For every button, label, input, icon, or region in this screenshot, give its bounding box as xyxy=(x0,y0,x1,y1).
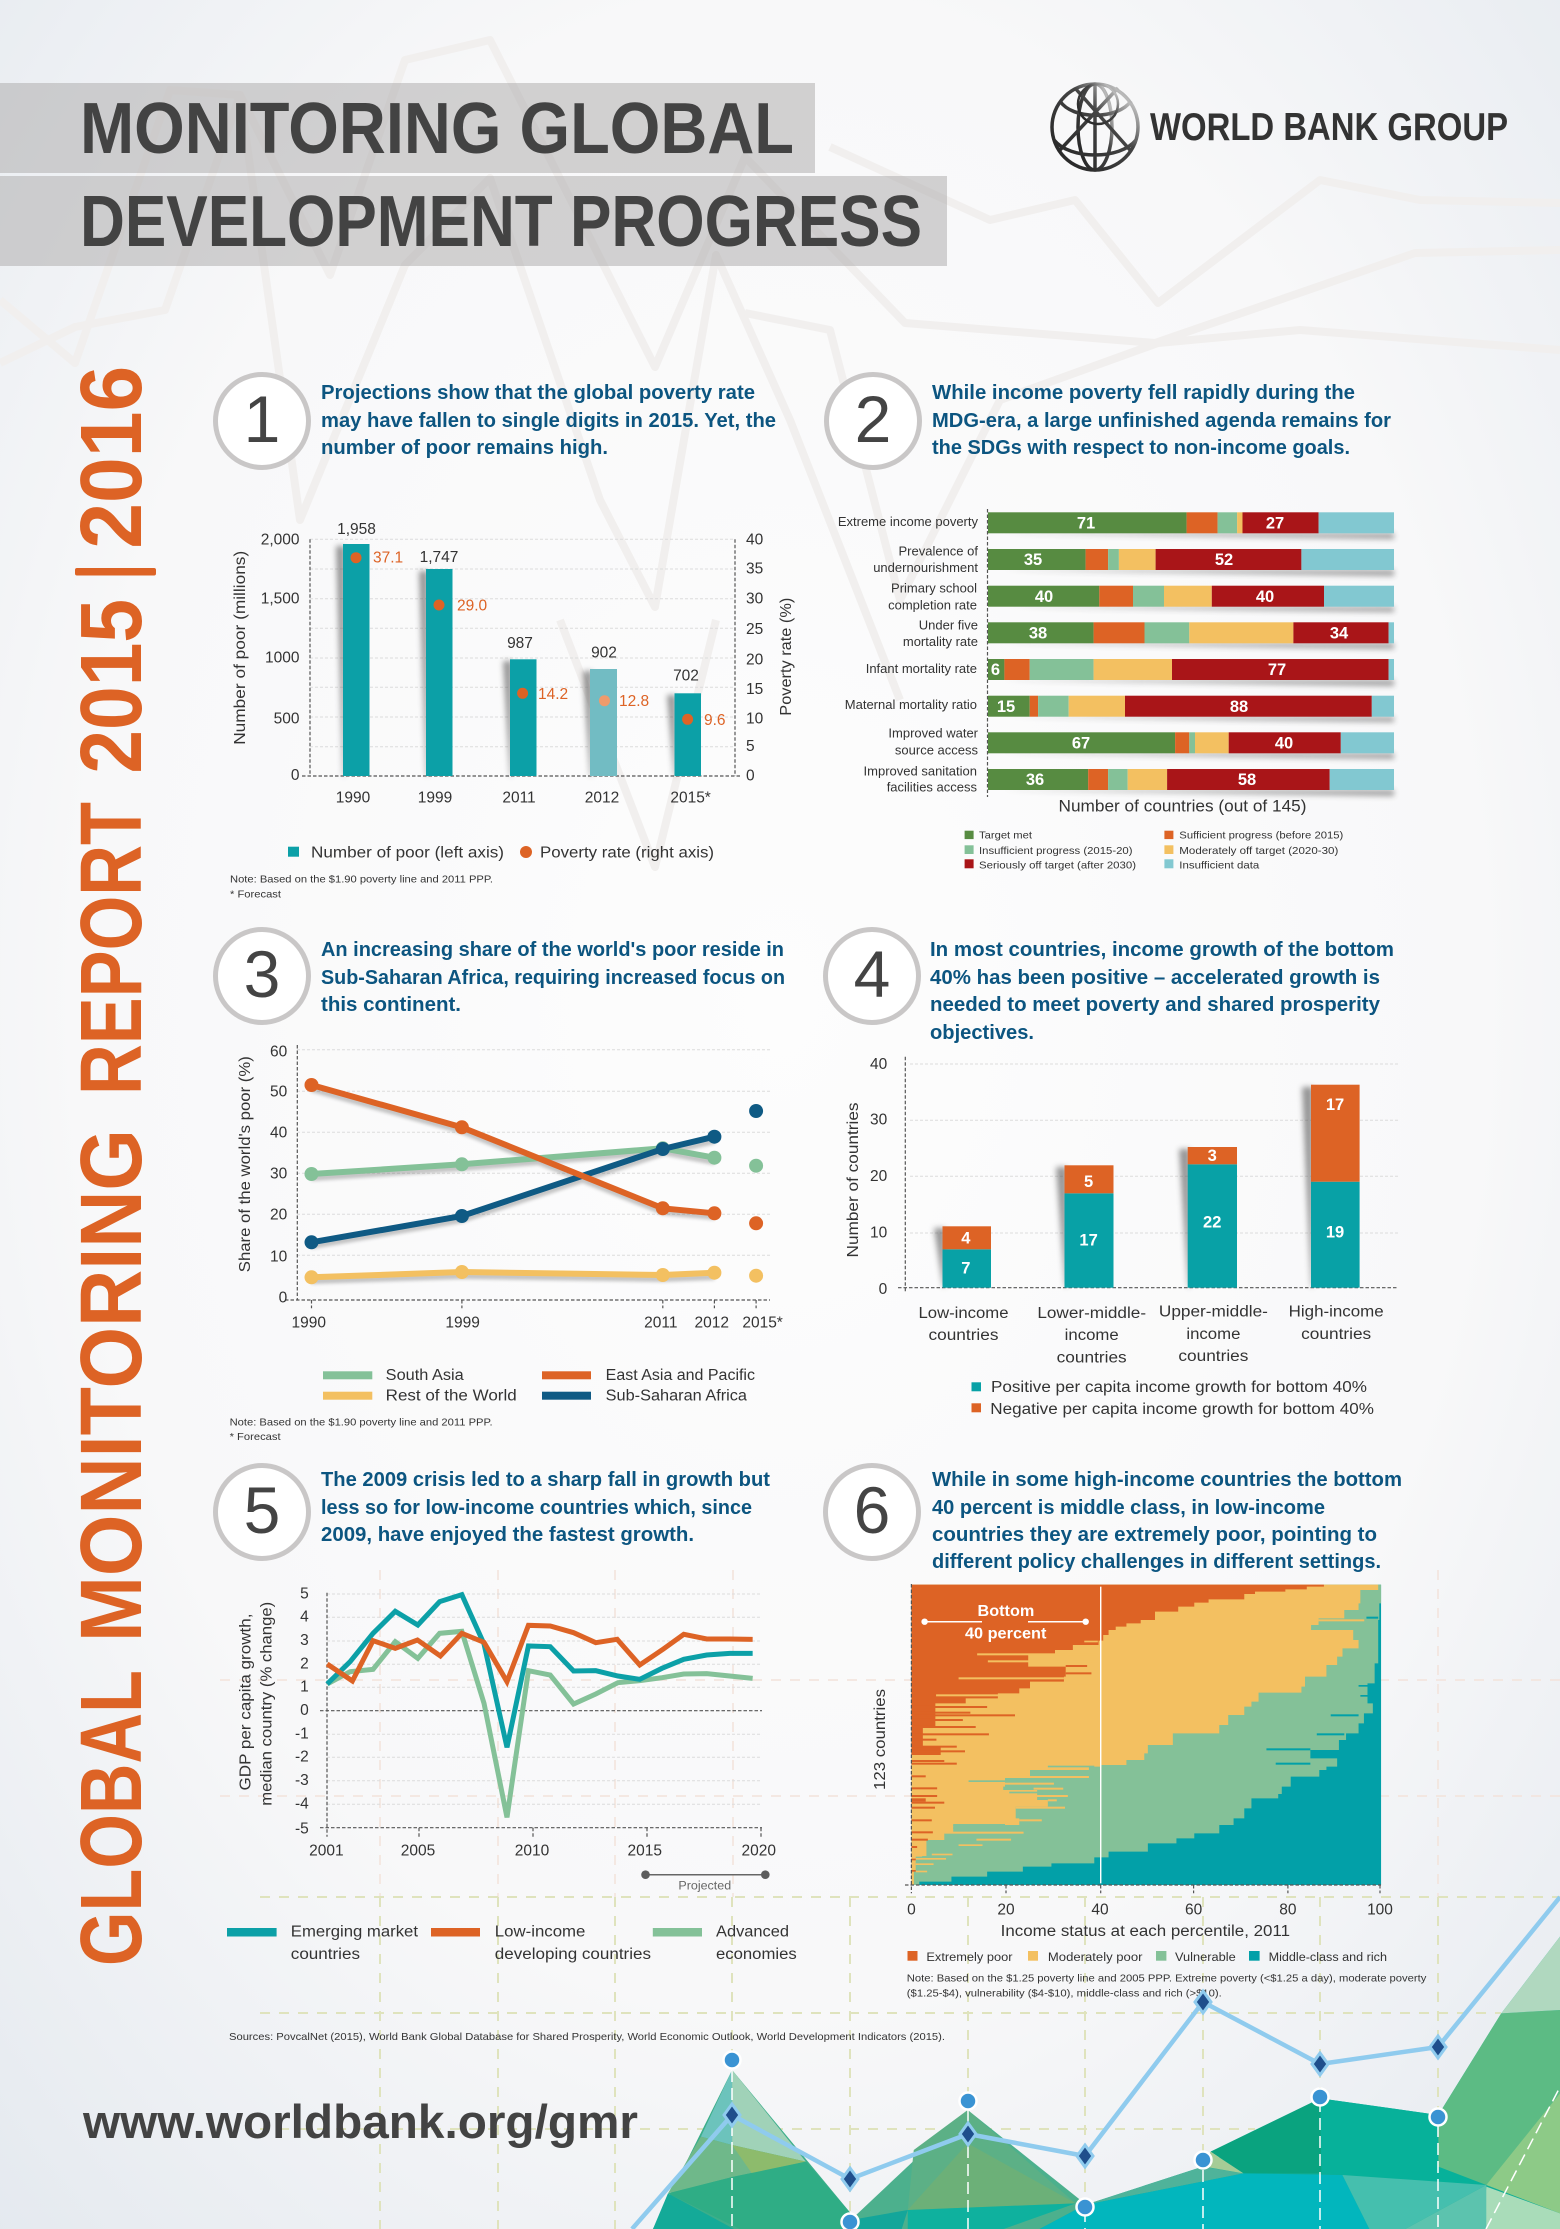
x axis labels: 40 xyxy=(1091,1901,1109,1918)
legend xyxy=(908,1951,1387,1964)
category labels: countries xyxy=(928,1327,999,1344)
bar: sanitation: 58 xyxy=(1238,771,1256,789)
category labels: countries xyxy=(1178,1348,1249,1365)
line: south asia xyxy=(304,1141,763,1181)
category labels: High-income xyxy=(1289,1304,1384,1321)
y axis labels: -4 xyxy=(295,1795,309,1812)
poverty rate values: 12.8 xyxy=(619,693,649,710)
year labels: 2010 xyxy=(515,1842,550,1859)
category labels: countries xyxy=(1057,1349,1127,1366)
bar: infant mortality: 77 xyxy=(1268,661,1286,679)
bar: maternal mortality: 88 xyxy=(1230,698,1248,716)
left axis labels: 1,500 xyxy=(261,591,300,608)
category labels: income xyxy=(1186,1326,1240,1343)
panel 2 heading: While income poverty fell rapidly during the xyxy=(932,382,1355,404)
bar: undernourishment xyxy=(988,549,1394,570)
note: * Forecast xyxy=(230,1431,281,1443)
panel 5 heading: 5 xyxy=(244,1473,280,1547)
number of poor values: 702 xyxy=(673,667,699,684)
area: moderately poor xyxy=(911,1585,1378,1885)
poverty rate values: 14.2 xyxy=(538,686,568,703)
poverty rate values xyxy=(373,550,726,729)
row labels: Primary school xyxy=(891,580,977,595)
legend: Advanced xyxy=(716,1924,789,1941)
website url: www.worldbank.org/gmr xyxy=(82,2095,638,2148)
legend: Insufficient data xyxy=(1179,859,1259,871)
y axis labels: -3 xyxy=(295,1772,309,1789)
legend: Rest of the World xyxy=(386,1387,517,1404)
panel 1 heading: 1 xyxy=(244,382,280,456)
y axis labels: 40 xyxy=(870,1056,888,1073)
bar: sanitation xyxy=(988,769,1394,790)
area: vulnerable xyxy=(911,1585,1381,1885)
right axis labels xyxy=(746,532,764,785)
legend: Extremely poor xyxy=(926,1952,1013,1964)
panel 3 heading: this continent. xyxy=(321,994,461,1016)
left axis labels: 1000 xyxy=(265,650,300,667)
panel 3 chart: share of the world's poor xyxy=(230,1044,783,1443)
panel 2 heading: the SDGs with respect to non-income goals. xyxy=(932,437,1350,459)
left axis labels: 0 xyxy=(291,767,300,784)
line: sub-saharan africa xyxy=(304,1104,763,1249)
row labels xyxy=(838,514,979,795)
legend xyxy=(972,1379,1374,1418)
note: ($1.25-$4), vulnerability ($4-$10), middle-class and rich (>$10). xyxy=(907,1988,1222,2000)
bar: infant mortality: 6 xyxy=(991,661,1000,679)
panel 6 heading: 40 percent is middle class, in low-income xyxy=(932,1497,1325,1519)
side title: MONITORING xyxy=(63,1129,160,1642)
legend xyxy=(227,1924,797,1963)
year labels: 2012 xyxy=(585,790,619,807)
y axis title: Number of countries xyxy=(845,1102,862,1257)
y axis labels: 10 xyxy=(870,1225,888,1242)
legend xyxy=(965,829,1343,871)
panel 1 heading xyxy=(216,374,776,468)
right axis labels: 35 xyxy=(746,560,763,577)
panel 5 heading: 2009, have enjoyed the fastest growth. xyxy=(321,1524,694,1546)
legend: economies xyxy=(716,1946,797,1963)
bar: maternal mortality: 15 xyxy=(997,698,1015,716)
bar: water: 40 xyxy=(1275,734,1293,752)
y axis labels: 30 xyxy=(270,1165,288,1182)
panel 4 heading: In most countries, income growth of the bottom xyxy=(930,939,1394,961)
right axis labels: 0 xyxy=(746,768,755,785)
note: Note: Based on the $1.90 poverty line and 2011 PPP. xyxy=(230,874,493,886)
area: extremely poor xyxy=(911,1585,1324,1872)
row labels: Extreme income poverty xyxy=(838,514,978,529)
category labels: countries xyxy=(1301,1326,1371,1343)
legend: Emerging market xyxy=(291,1924,419,1941)
legend: Seriously off target (after 2030) xyxy=(979,859,1136,871)
number of poor values: 987 xyxy=(507,635,533,652)
row labels: mortality rate xyxy=(903,634,978,649)
panel 2 heading xyxy=(826,374,1391,468)
x axis labels: 60 xyxy=(1185,1901,1203,1918)
bar: primary school: 40 xyxy=(1035,588,1053,606)
right axis labels: 40 xyxy=(746,532,764,549)
panel 6 heading xyxy=(826,1466,1402,1573)
legend xyxy=(323,1367,755,1404)
legend: South Asia xyxy=(386,1367,464,1384)
bar: infant mortality xyxy=(988,659,1394,680)
row labels: Under five xyxy=(919,617,978,632)
year labels: 2005 xyxy=(401,1842,435,1859)
sources: Sources: PovcalNet (2015), World Bank Global Database for Shared Prosperity, World Economic Outlook, World Development Indicators (2015). xyxy=(229,2031,945,2043)
year labels xyxy=(336,790,711,807)
legend: Positive per capita income growth for bottom 40% xyxy=(991,1379,1367,1396)
bar values xyxy=(961,1096,1344,1277)
legend: Number of poor (left axis) xyxy=(311,844,504,861)
note xyxy=(230,1416,493,1443)
y axis labels: 50 xyxy=(270,1084,288,1101)
year labels: 2020 xyxy=(742,1842,776,1859)
note xyxy=(907,1973,1427,2000)
bar: under five mortality xyxy=(988,622,1394,643)
legend: Poverty rate (right axis) xyxy=(540,844,714,861)
logo: World Bank Group xyxy=(1052,84,1508,170)
right axis labels: 5 xyxy=(746,738,755,755)
title banner: DEVELOPMENT PROGRESS xyxy=(80,182,922,262)
panel 1 heading: number of poor remains high. xyxy=(321,437,608,459)
panel 3 heading: 3 xyxy=(244,937,280,1011)
panel 5 heading: The 2009 crisis led to a sharp fall in growth but xyxy=(321,1469,770,1491)
projected range: Projected xyxy=(678,1880,731,1892)
right axis labels: 25 xyxy=(746,621,763,638)
axis titles xyxy=(232,551,795,745)
y axis labels: -2 xyxy=(295,1749,309,1766)
x axis labels: 80 xyxy=(1279,1901,1297,1918)
legend: Low-income xyxy=(495,1924,585,1941)
streaks: yellow in extremely poor xyxy=(936,1641,1099,1696)
row labels: Maternal mortality ratio xyxy=(845,697,977,712)
y axis labels: 4 xyxy=(300,1608,309,1625)
poverty rate values: 29.0 xyxy=(457,597,488,614)
bar: undernourishment: 35 xyxy=(1024,551,1042,569)
x axis labels: 0 xyxy=(907,1901,916,1918)
row labels: undernourishment xyxy=(873,560,978,575)
row labels: Improved sanitation xyxy=(864,763,977,778)
footer graphic: mountains xyxy=(653,1937,1560,2229)
y axis labels: 20 xyxy=(870,1168,888,1185)
bar: extreme income poverty xyxy=(988,512,1394,533)
category labels xyxy=(918,1304,1384,1366)
year labels xyxy=(309,1842,776,1859)
footer graphic: blue line with diamonds xyxy=(632,1897,1560,2229)
note: Note: Based on the $1.25 poverty line and 2005 PPP. Extreme poverty (<$1.25 a day), moderate poverty xyxy=(907,1973,1427,1985)
y axis labels: 0 xyxy=(279,1289,288,1306)
right axis labels: 10 xyxy=(746,710,764,727)
panel 1 heading: may have fallen to single digits in 2015. Yet, the xyxy=(321,410,776,432)
legend: developing countries xyxy=(495,1946,651,1963)
line: low-income developing countries xyxy=(327,1625,753,1682)
poverty rate values: 9.6 xyxy=(704,712,726,729)
number of poor values xyxy=(337,521,699,684)
panel 5 heading xyxy=(216,1466,770,1558)
x axis labels xyxy=(907,1901,1393,1918)
panel 6 heading: different policy challenges in different settings. xyxy=(932,1551,1381,1573)
bar values: 17 xyxy=(1326,1096,1344,1114)
note: * Forecast xyxy=(230,888,281,900)
year labels: 2012 xyxy=(694,1315,729,1332)
y axis labels: 20 xyxy=(270,1206,288,1223)
left axis labels: 500 xyxy=(274,710,300,727)
line: east asia and pacific xyxy=(304,1078,763,1230)
legend: Target met xyxy=(979,829,1032,841)
legend: countries xyxy=(291,1946,360,1963)
bottom 40 percent marker xyxy=(921,1603,1089,1643)
panel 5 chart: GDP per capita growth xyxy=(227,1586,797,1963)
bar values: 7 xyxy=(961,1259,970,1277)
bar values: 4 xyxy=(961,1229,971,1247)
year labels: 2015* xyxy=(742,1315,783,1332)
footer graphic: blue circles xyxy=(724,2052,1446,2229)
bar: primary school: 40 xyxy=(1256,588,1274,606)
number of poor values: 902 xyxy=(591,645,617,662)
y axis labels: 10 xyxy=(270,1249,288,1266)
y axis title: median country (% change) xyxy=(259,1602,276,1806)
panel 4 heading: 4 xyxy=(854,937,890,1011)
y axis labels: 30 xyxy=(870,1111,888,1128)
side title: 2016 xyxy=(63,366,160,549)
bar values: 5 xyxy=(1084,1173,1093,1191)
year labels: 1990 xyxy=(292,1315,326,1332)
poverty rate values: 37.1 xyxy=(373,550,403,567)
bar: under five mortality: 34 xyxy=(1330,624,1349,642)
line: 40th percentile xyxy=(1100,1587,1101,1883)
side title xyxy=(63,366,160,1966)
y axis labels: 0 xyxy=(879,1281,888,1298)
year labels: 2015* xyxy=(670,790,711,807)
bar: under five mortality: 38 xyxy=(1029,624,1047,642)
legend: Vulnerable xyxy=(1175,1952,1236,1964)
year labels: 2011 xyxy=(644,1315,677,1332)
legend: Sub-Saharan Africa xyxy=(606,1387,747,1404)
panel 4 heading xyxy=(826,930,1394,1044)
panel 3 heading xyxy=(216,930,785,1022)
category labels: Lower-middle- xyxy=(1037,1305,1146,1322)
streaks: teal in vulnerable xyxy=(1266,1617,1378,1765)
area: middle-class and rich xyxy=(911,1585,1381,1885)
panel 2 heading: 2 xyxy=(855,382,891,456)
left axis labels: 2,000 xyxy=(261,532,300,549)
panel 6 heading: countries they are extremely poor, pointing to xyxy=(932,1524,1377,1546)
y axis labels xyxy=(295,1586,309,1837)
stacked bars xyxy=(942,1085,1360,1288)
right axis labels: 30 xyxy=(746,590,764,607)
legend: East Asia and Pacific xyxy=(606,1367,755,1384)
note: Note: Based on the $1.90 poverty line and 2011 PPP. xyxy=(230,1416,493,1428)
y axis title: GDP per capita growth, xyxy=(238,1614,255,1790)
panel 5 heading: less so for low-income countries which, since xyxy=(321,1497,752,1519)
y axis labels: 1 xyxy=(300,1679,309,1696)
bar: water: 67 xyxy=(1072,734,1090,752)
right axis labels: 20 xyxy=(746,652,764,669)
panel 6 heading: 6 xyxy=(854,1473,890,1547)
legend xyxy=(288,844,714,861)
side title: GLOBAL xyxy=(63,1670,160,1966)
y axis labels: 0 xyxy=(300,1702,309,1719)
bar: sanitation: 36 xyxy=(1026,771,1044,789)
legend: Middle-class and rich xyxy=(1269,1952,1387,1964)
year labels: 1999 xyxy=(418,790,452,807)
year labels: 2001 xyxy=(309,1842,344,1859)
x axis labels: 20 xyxy=(997,1901,1015,1918)
y axis title: 123 countries xyxy=(872,1689,889,1790)
right axis labels: 15 xyxy=(746,681,763,698)
bar: undernourishment: 52 xyxy=(1215,551,1233,569)
bar: maternal mortality xyxy=(988,696,1394,717)
bar values: 17 xyxy=(1079,1232,1098,1250)
line: emerging market countries xyxy=(327,1595,753,1747)
bottom 40 percent marker: 40 percent xyxy=(965,1626,1047,1643)
bar values: 22 xyxy=(1203,1213,1221,1231)
note xyxy=(230,874,493,900)
line: rest of the world xyxy=(304,1265,763,1284)
panel 4 heading: 40% has been positive – accelerated growth is xyxy=(930,967,1380,989)
legend: Sufficient progress (before 2015) xyxy=(1179,829,1343,841)
category labels: Low-income xyxy=(918,1305,1008,1322)
bar: extreme income poverty: 27 xyxy=(1266,514,1284,532)
panel 1 chart: number of poor and poverty rate xyxy=(230,521,795,900)
axis title: Number of countries (out of 145) xyxy=(1058,798,1306,816)
y axis labels: 3 xyxy=(300,1632,309,1649)
x axis title: Income status at each percentile, 2011 xyxy=(1001,1923,1290,1940)
bar: primary school xyxy=(988,586,1394,607)
bar values: 19 xyxy=(1326,1224,1344,1242)
year labels: 2015 xyxy=(628,1842,662,1859)
number of poor values: 1,747 xyxy=(420,549,458,566)
legend: Moderately poor xyxy=(1048,1952,1143,1964)
legend: Moderately off target (2020-30) xyxy=(1179,845,1338,857)
legend: Insufficient progress (2015-20) xyxy=(979,845,1132,857)
panel 6 chart: income status by percentile xyxy=(872,1584,1427,2000)
row labels: Infant mortality rate xyxy=(866,661,977,676)
x axis labels: 100 xyxy=(1367,1901,1393,1918)
legend: Negative per capita income growth for bottom 40% xyxy=(990,1401,1374,1418)
poverty rate dots xyxy=(350,552,693,725)
bar values: 3 xyxy=(1208,1147,1217,1165)
bottom 40 percent marker: Bottom xyxy=(978,1603,1034,1620)
y axis labels: 40 xyxy=(270,1124,288,1141)
y axis labels: 2 xyxy=(300,1655,309,1672)
year labels: 1990 xyxy=(336,790,371,807)
row labels: completion rate xyxy=(888,597,977,612)
streaks: yellow and green mix xyxy=(916,1766,1094,1872)
y axis title xyxy=(238,1602,276,1806)
axis titles: Number of poor (millions) xyxy=(232,551,249,745)
bar: extreme income poverty: 71 xyxy=(1077,514,1095,532)
panel 1 heading: Projections show that the global poverty rate xyxy=(321,382,755,404)
title banner: MONITORING GLOBAL xyxy=(80,89,794,169)
y axis labels: -5 xyxy=(295,1820,309,1837)
left axis labels xyxy=(261,532,300,784)
year labels xyxy=(292,1315,783,1332)
panel 4 heading: objectives. xyxy=(930,1022,1034,1044)
row labels: facilities access xyxy=(887,780,977,795)
title banner xyxy=(0,83,947,266)
row labels: source access xyxy=(895,742,978,757)
y axis labels xyxy=(870,1056,888,1298)
row labels: Improved water xyxy=(888,726,979,741)
side title: REPORT xyxy=(63,802,160,1095)
bar: water xyxy=(988,732,1394,753)
panel 2 heading: MDG-era, a large unfinished agenda remains for xyxy=(932,410,1391,432)
bars xyxy=(343,544,701,776)
panel 6 heading: While in some high-income countries the bottom xyxy=(932,1469,1402,1491)
panel 3 heading: Sub-Saharan Africa, requiring increased focus on xyxy=(321,967,785,989)
panel 4 heading: needed to meet poverty and shared prosperity xyxy=(930,994,1381,1016)
y axis labels: 5 xyxy=(300,1586,309,1603)
y axis title: Share of the world's poor (%) xyxy=(237,1056,254,1272)
panel 3 heading: An increasing share of the world's poor reside in xyxy=(321,939,784,961)
category labels: income xyxy=(1065,1327,1119,1344)
y axis labels xyxy=(270,1044,288,1306)
axis titles: Poverty rate (%) xyxy=(778,598,795,716)
category labels: Upper-middle- xyxy=(1159,1304,1268,1321)
line: advanced economies xyxy=(327,1631,753,1817)
y axis labels: -1 xyxy=(295,1725,309,1742)
projected range xyxy=(641,1870,770,1892)
panel 4 chart: countries by income growth xyxy=(845,1056,1398,1418)
y axis labels: 60 xyxy=(270,1044,288,1061)
number of poor values: 1,958 xyxy=(337,521,376,538)
year labels: 1999 xyxy=(445,1315,480,1332)
row labels: Prevalence of xyxy=(898,543,978,558)
year labels: 2011 xyxy=(502,790,536,807)
panel 2 chart: stacked bars of countries xyxy=(838,509,1394,871)
side title: 2015 xyxy=(63,599,160,774)
